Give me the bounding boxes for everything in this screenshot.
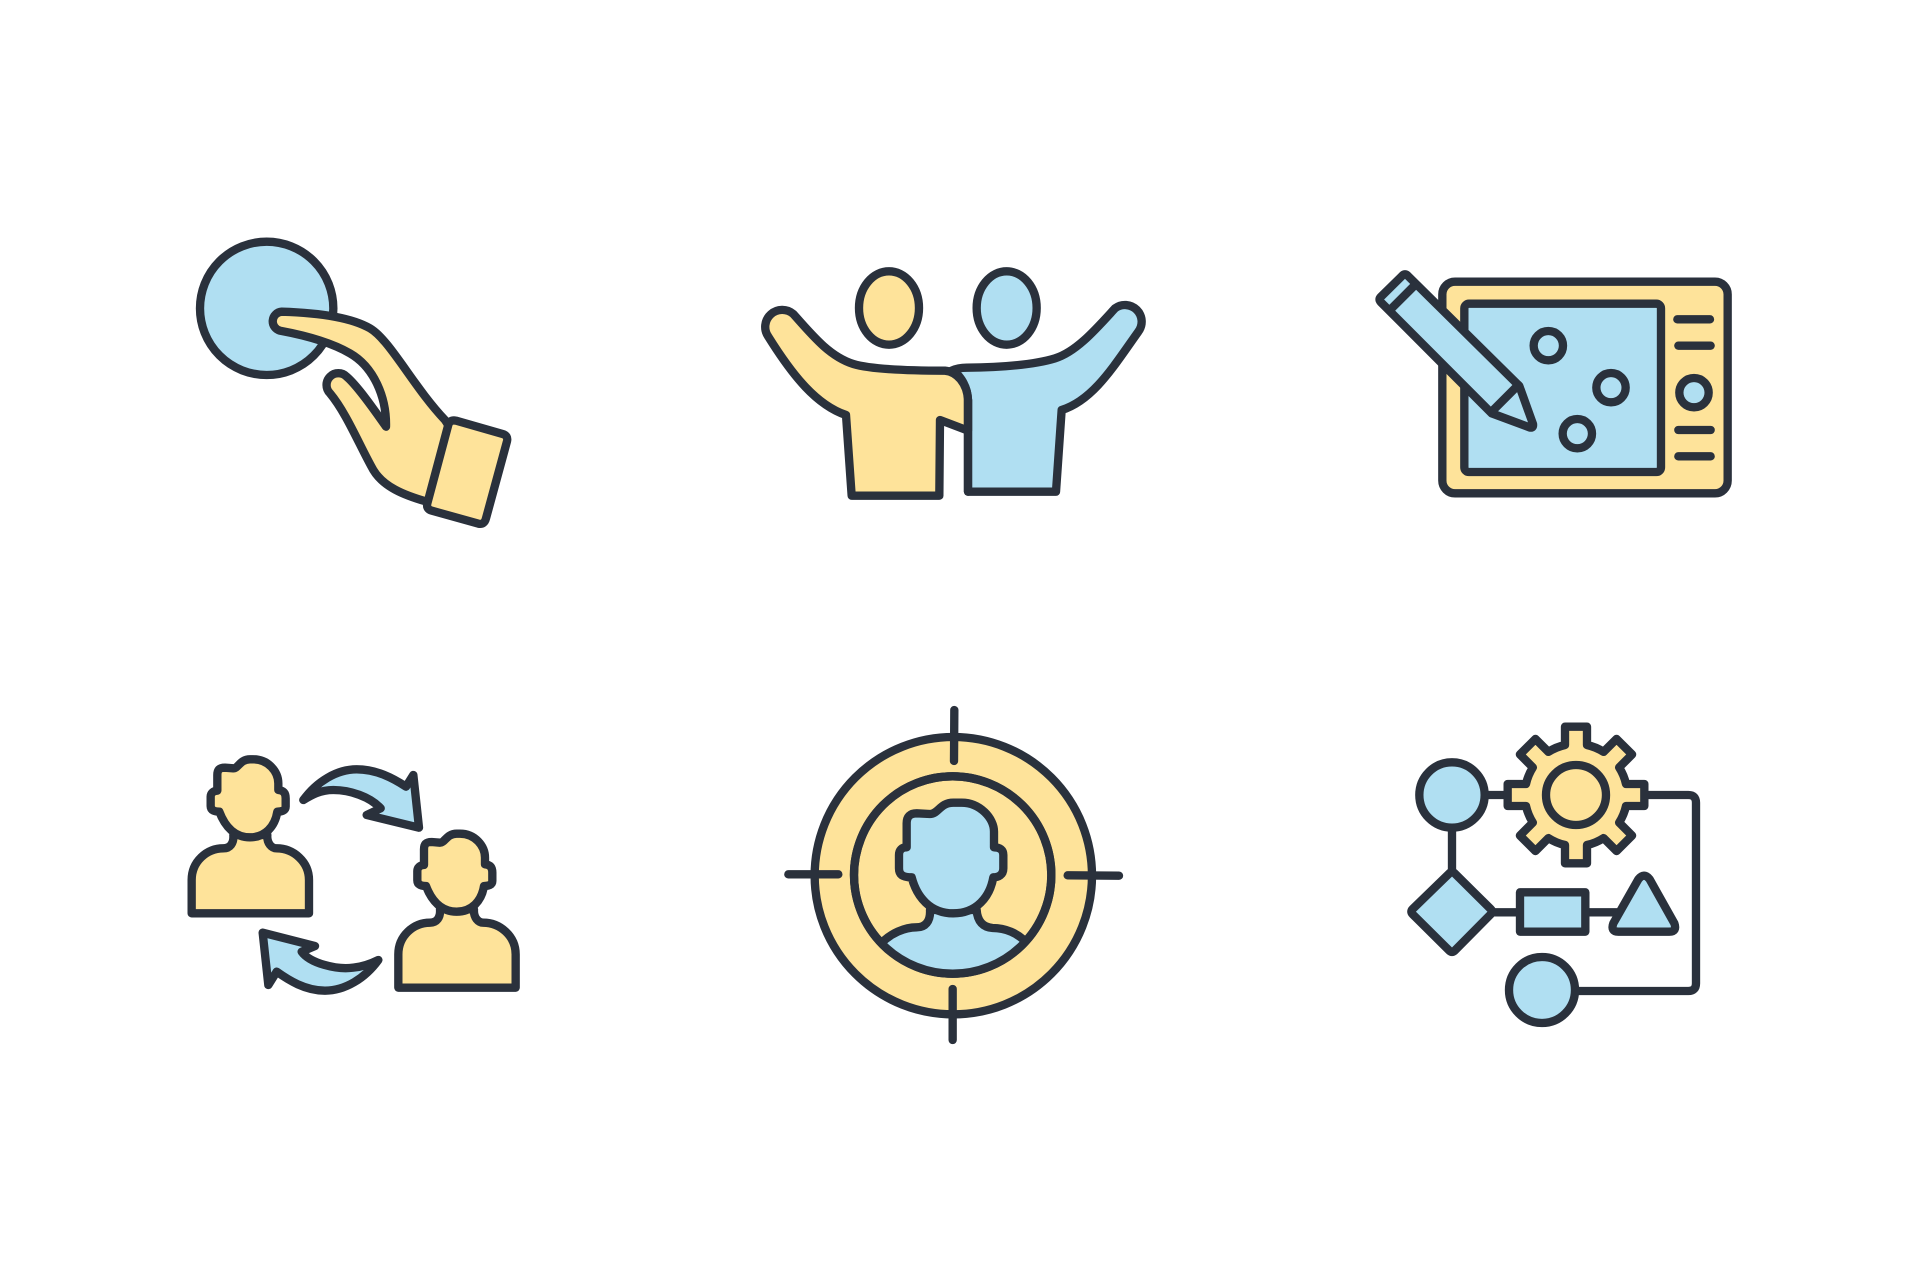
inner ring outline	[854, 776, 1051, 974]
person shoulders	[882, 908, 1025, 970]
icon: person in target crosshair	[788, 710, 1119, 1040]
arrow: bottom	[263, 933, 378, 991]
tablet screen	[1464, 304, 1661, 472]
process rectangle	[1520, 892, 1585, 932]
head: left person	[859, 271, 919, 345]
icon: people exchange cycle	[192, 759, 516, 991]
end node circle	[1509, 957, 1575, 1023]
sleeve cuff	[427, 420, 507, 524]
hand	[273, 312, 460, 502]
crosshair ticks	[788, 710, 1119, 1040]
person: bottom right	[398, 834, 516, 988]
person head	[899, 803, 1003, 913]
shoulder and arm divider	[955, 400, 980, 492]
screen dots	[1534, 331, 1626, 448]
icon set canvas	[188, 238, 1732, 1044]
icon: hand touching circle	[200, 242, 507, 524]
icon: process flowchart with gear	[1411, 727, 1696, 1023]
inner ring	[854, 776, 1051, 974]
triangle node	[1613, 876, 1675, 932]
side buttons	[1677, 319, 1711, 456]
pen	[1379, 274, 1533, 428]
left person body	[765, 310, 968, 496]
connector lines	[1452, 795, 1696, 991]
outer ring	[815, 737, 1092, 1014]
gear	[1508, 727, 1644, 863]
icon: graphics tablet and pen	[1379, 274, 1728, 493]
start node circle	[1419, 762, 1485, 828]
blue circle	[200, 242, 333, 375]
decision diamond	[1411, 872, 1492, 952]
tablet body	[1442, 282, 1728, 493]
arrow: top	[303, 769, 419, 828]
person: top left	[192, 759, 309, 913]
head: right person	[977, 271, 1037, 345]
icon: two people embracing	[765, 271, 1142, 496]
right person body	[952, 305, 1142, 492]
